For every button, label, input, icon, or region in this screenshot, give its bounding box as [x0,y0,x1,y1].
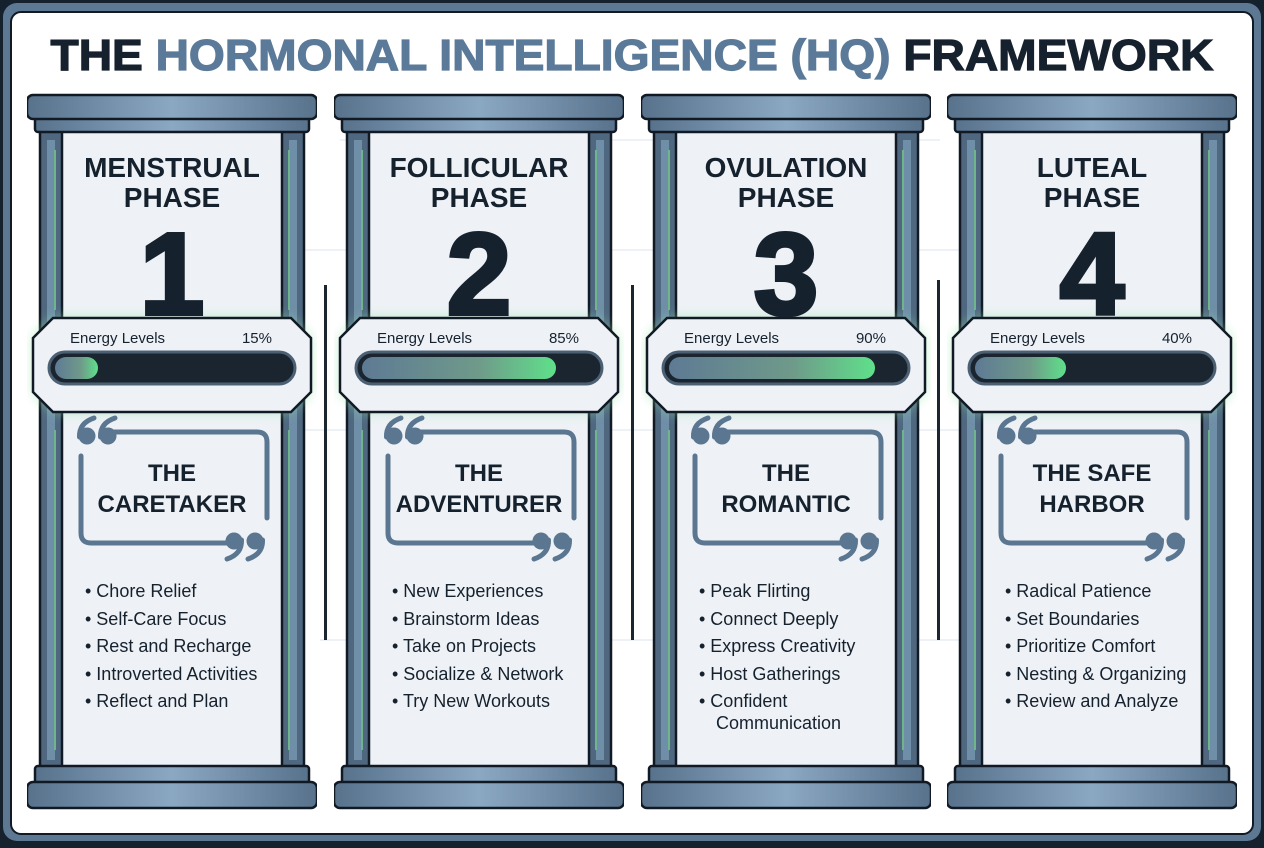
number: 3 [754,209,818,339]
bullet list: • Chore Relief [85,581,197,601]
title: THE HORMONAL INTELLIGENCE (HQ) FRAMEWORK [50,31,1214,80]
heading: FOLLICULAR [390,152,568,183]
bullet list: • Reflect and Plan [85,691,228,711]
callout: persona: THE SAFE [1033,460,1151,487]
bullet list: • Socialize & Network [392,664,564,684]
bullet list: • Express Creativity [699,636,855,656]
energy bar: 85% [549,330,579,347]
energy bar: 90% [856,330,886,347]
callout: persona: THE [762,460,810,487]
callout: persona: CARETAKER [98,491,246,518]
heading: PHASE [431,182,527,213]
energy bar [362,330,579,379]
heading: PHASE [1044,182,1140,213]
panel: follicular phase [334,95,624,808]
bullet list: • Radical Patience [1005,581,1151,601]
bullet list: Communication [716,713,841,733]
bullet list: • New Experiences [392,581,543,601]
energy bar: 15% [242,330,272,347]
bullet list: • Take on Projects [392,636,536,656]
bullet list: • Review and Analyze [1005,691,1178,711]
energy bar: Energy Levels [990,330,1085,347]
energy bar: Energy Levels [377,330,472,347]
bullet list: • Brainstorm Ideas [392,609,539,629]
number: 2 [447,209,511,339]
bullet list: • Set Boundaries [1005,609,1139,629]
bullet list: • Prioritize Comfort [1005,636,1155,656]
bullet list: • Host Gatherings [699,664,840,684]
energy bar: Energy Levels [684,330,779,347]
panel: ovulation phase [641,95,931,808]
heading: PHASE [124,182,220,213]
bullet list: • Connect Deeply [699,609,838,629]
bullet list: • Nesting & Organizing [1005,664,1186,684]
bullet list: • Try New Workouts [392,691,550,711]
heading: MENSTRUAL [84,152,260,183]
bullet list: • Peak Flirting [699,581,810,601]
energy bar [55,330,272,379]
energy bar [669,330,886,379]
callout: persona: THE [455,460,503,487]
energy bar: Energy Levels [70,330,165,347]
bullet list: • Introverted Activities [85,664,257,684]
heading: OVULATION [705,152,867,183]
energy bar [975,330,1192,379]
callout: persona: ADVENTURER [396,491,562,518]
panel: luteal phase [947,95,1237,808]
panel: menstrual phase [27,95,317,808]
energy bar: 40% [1162,330,1192,347]
number: 4 [1060,209,1124,339]
heading: LUTEAL [1037,152,1147,183]
bullet list: • Rest and Recharge [85,636,251,656]
bullet list: • Confident [699,691,787,711]
bullet list: • Self-Care Focus [85,609,226,629]
number: 1 [140,209,204,339]
heading: PHASE [738,182,834,213]
callout: persona: ROMANTIC [721,491,851,518]
callout: persona: THE [148,460,196,487]
callout: persona: HARBOR [1039,491,1145,518]
